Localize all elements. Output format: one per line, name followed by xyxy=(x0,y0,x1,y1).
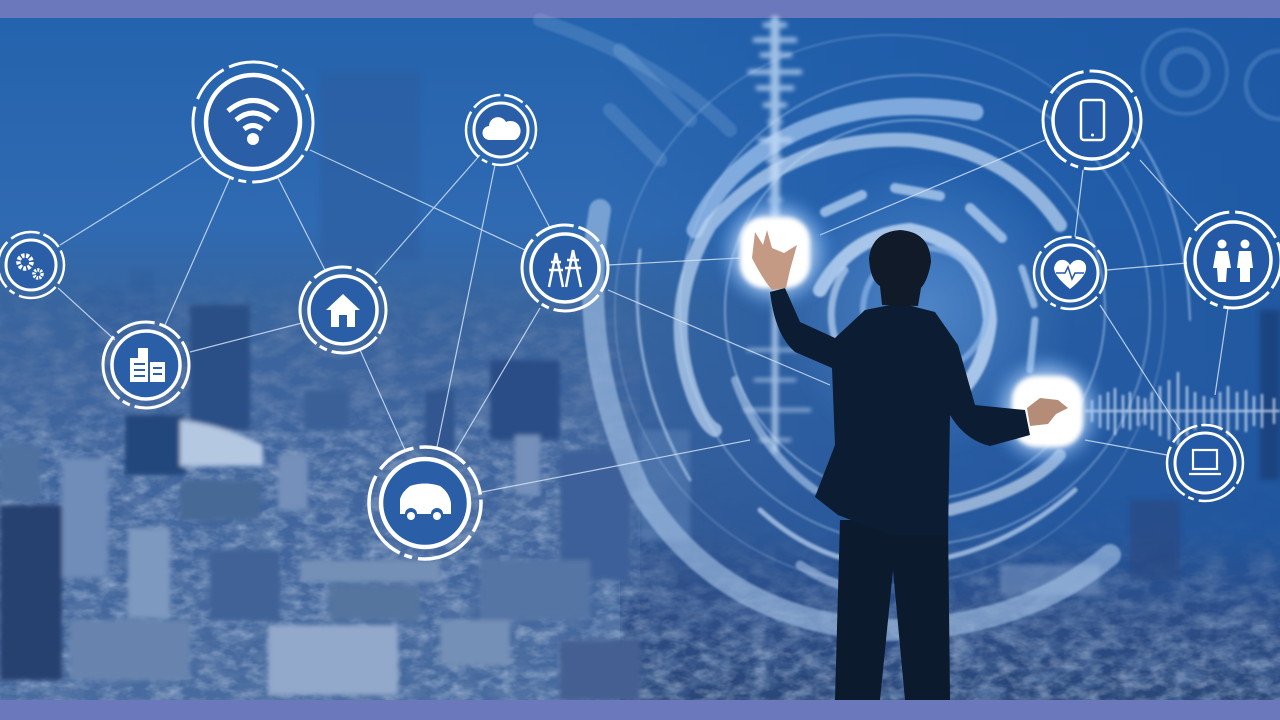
legs xyxy=(835,520,950,700)
icon node: people xyxy=(1185,212,1280,308)
icon node: power towers xyxy=(522,225,608,311)
horizontal waveform xyxy=(1085,372,1280,445)
icon node: cloud xyxy=(466,95,536,165)
right hand xyxy=(1027,398,1068,426)
businessman silhouette xyxy=(752,230,1068,700)
vertical waveform xyxy=(745,20,810,450)
icon node: wifi xyxy=(193,62,313,182)
bottom band xyxy=(0,700,1280,720)
icon node: heart monitor xyxy=(1034,237,1106,309)
city buildings xyxy=(0,305,1280,700)
head xyxy=(869,230,931,306)
icon node: gears xyxy=(0,232,64,298)
city skyline xyxy=(0,70,640,700)
city lower right xyxy=(600,18,1280,700)
network connection lines xyxy=(58,140,1228,492)
icon node: car xyxy=(369,447,481,559)
icon node: smartphone xyxy=(1043,71,1141,169)
top band xyxy=(0,0,1280,18)
city texture xyxy=(0,270,1280,700)
icon node: laptop xyxy=(1167,425,1243,501)
left hand xyxy=(752,230,797,290)
icon node: buildings xyxy=(103,322,189,408)
icon node: home xyxy=(300,267,386,353)
hologram rings xyxy=(540,20,1280,630)
glowing touch button: left hand xyxy=(717,194,833,310)
torso and arms xyxy=(770,288,1030,535)
glowing touch button: right hand xyxy=(989,353,1105,469)
